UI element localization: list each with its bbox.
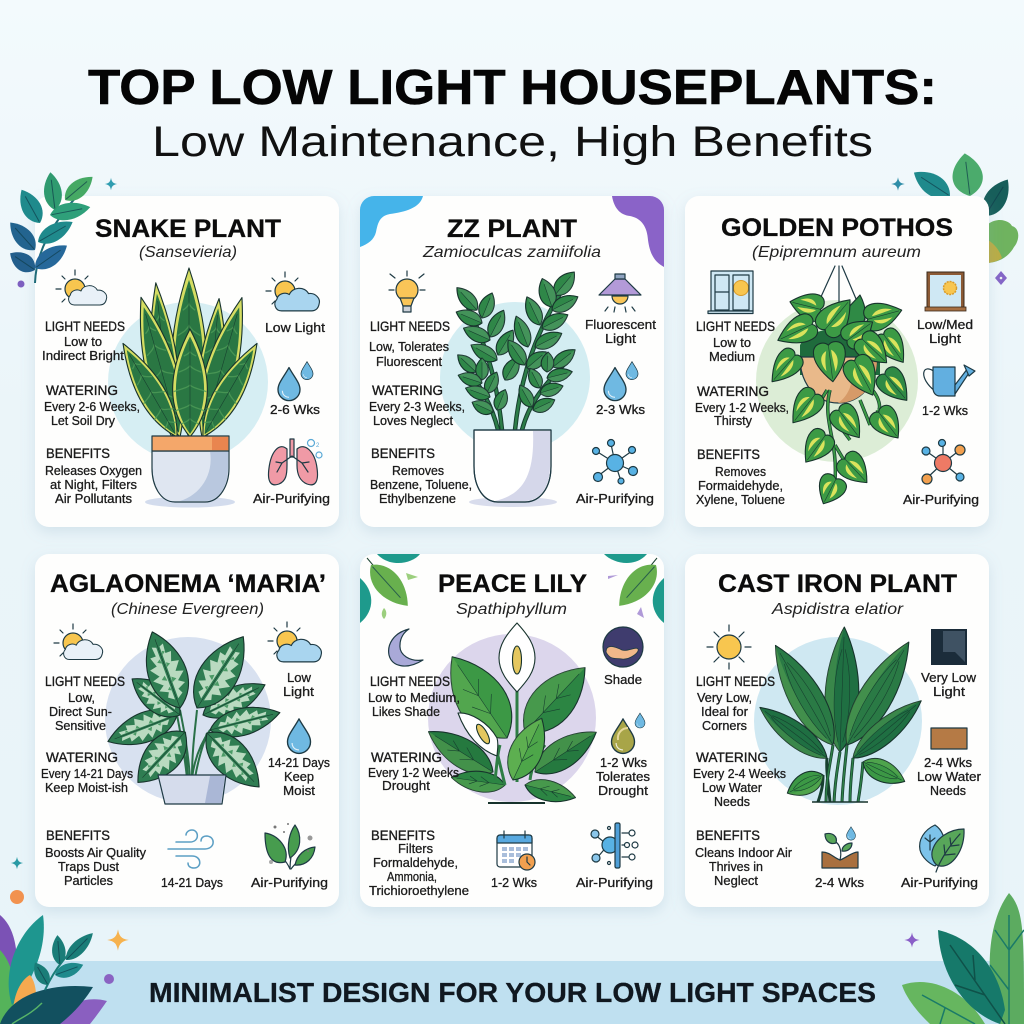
label: shade: Shade xyxy=(604,672,642,687)
benefits text: BENEFITS xyxy=(697,447,760,462)
icon: blue and green leaves xyxy=(920,825,964,872)
benefits text xyxy=(45,446,142,506)
light needs text xyxy=(696,674,775,733)
card background xyxy=(360,196,664,527)
benefits text xyxy=(370,446,472,506)
backdrop circle xyxy=(428,634,596,802)
light needs text xyxy=(369,319,450,369)
benefits text: BENEFITS xyxy=(46,446,110,461)
icon: shade hand xyxy=(603,627,643,667)
watering text: Every 14-21 Days xyxy=(41,766,133,781)
icon: window with sun xyxy=(708,271,753,314)
card background xyxy=(360,554,664,907)
pot shadow xyxy=(145,496,235,508)
label: watering interval: 2-6 Wks xyxy=(270,402,321,417)
icon: watering can xyxy=(924,365,975,396)
watering text: WATERING xyxy=(46,750,118,765)
panel: zz plant xyxy=(360,196,664,527)
pot xyxy=(152,436,229,502)
icon: light bulb xyxy=(389,271,425,312)
heading: AGLAONEMA ‘MARIA’ xyxy=(50,570,326,598)
benefits text xyxy=(45,828,146,888)
light needs text: LIGHT NEEDS xyxy=(696,319,775,334)
watering text: WATERING xyxy=(696,750,768,765)
light needs text xyxy=(696,319,775,364)
pot xyxy=(474,430,551,502)
heading: GOLDEN POTHOS xyxy=(721,214,953,242)
watering text: WATERING xyxy=(46,383,118,398)
label: air-purifying: Air-Purifying xyxy=(903,492,979,507)
botanical name: (Epipremnum aureum xyxy=(752,244,921,261)
pot xyxy=(158,775,226,804)
heading: CAST IRON PLANT xyxy=(718,570,957,598)
decoration: orange dot xyxy=(10,890,24,904)
watering text xyxy=(695,384,789,428)
benefits text: Neglect xyxy=(714,873,758,888)
benefits text: Traps Dust xyxy=(58,859,119,874)
watering text: WATERING xyxy=(372,383,443,398)
light needs text: Sensitive xyxy=(55,718,106,733)
title: TOP LOW LIGHT HOUSEPLANTS: xyxy=(88,61,937,115)
decoration: bottom-left foliage xyxy=(0,915,107,1024)
decoration: purple diamond xyxy=(995,271,1007,285)
botanical name: Zamioculcas zamiifolia xyxy=(422,244,601,261)
benefits text: Removes xyxy=(715,464,766,479)
benefits text: Formaidehyde, xyxy=(698,478,783,493)
footer text: MINIMALIST DESIGN FOR YOUR LOW LIGHT SPACES xyxy=(149,977,876,1008)
benefits text: Boosts Air Quality xyxy=(45,845,146,860)
icon: calendar with clock xyxy=(497,831,535,870)
icon: water drops xyxy=(278,362,313,401)
label: low light: Low Light xyxy=(265,320,325,335)
card background xyxy=(685,554,989,907)
icon: soil block xyxy=(931,728,967,749)
label: fluorescent light xyxy=(585,317,656,346)
label: low light: Low xyxy=(287,670,312,685)
label: very low light xyxy=(921,670,977,699)
decoration: top-left branch xyxy=(4,170,98,283)
plant illustration xyxy=(112,268,268,444)
card background xyxy=(35,554,339,907)
heading: SNAKE PLANT xyxy=(95,215,281,243)
light needs text: Very Low, xyxy=(697,690,752,705)
plant illustration xyxy=(452,267,581,430)
icon: wind xyxy=(168,830,213,868)
decoration: bottom purple dot xyxy=(104,974,114,984)
plant illustration xyxy=(421,623,604,807)
watering text: Needs xyxy=(714,794,750,809)
backdrop circle xyxy=(756,300,918,462)
label: low water needs: 2-4 Wks xyxy=(924,755,973,770)
watering text xyxy=(693,750,786,809)
label: fluorescent light: Fluorescent xyxy=(585,317,656,332)
label: tolerates drought: Tolerates xyxy=(596,769,651,784)
watering text: Let Soil Dry xyxy=(51,413,115,428)
backdrop circle xyxy=(105,637,271,803)
light needs text: Low to xyxy=(713,335,751,350)
label: very low light: Very Low xyxy=(921,670,977,685)
light needs text: Low, Tolerates xyxy=(369,339,449,354)
icon: sprout in soil xyxy=(822,827,858,868)
watering text: Low Water xyxy=(702,780,763,795)
label: watering interval: 2-3 Wks xyxy=(596,402,646,417)
panel: golden pothos xyxy=(685,196,989,527)
common name: (Chinese Evergreen) xyxy=(111,601,264,618)
benefits text xyxy=(695,828,793,888)
benefits text: Filters xyxy=(398,841,433,856)
benefits text: BENEFITS xyxy=(371,446,435,461)
icon: air filter molecules xyxy=(591,823,638,868)
pot shadow xyxy=(469,497,557,507)
backdrop circle xyxy=(440,302,590,452)
decoration: top-right sparkle xyxy=(891,177,905,191)
plant illustration xyxy=(103,625,283,799)
backdrop circle xyxy=(108,302,268,462)
plant illustration xyxy=(753,626,929,803)
icon: crescent moon xyxy=(389,629,423,666)
label: low light: Light xyxy=(283,684,314,699)
benefits text: Ethylbenzene xyxy=(379,491,456,506)
card background xyxy=(35,196,339,527)
benefits text: Benzene, Toluene, xyxy=(370,477,472,492)
label: low/med light: Low/Med xyxy=(917,317,973,332)
label: very low light: Light xyxy=(933,684,965,699)
watering text: Thirsty xyxy=(714,413,752,428)
botanical name: Aspidistra elatior xyxy=(771,601,904,618)
botanical name: Spathiphyllum xyxy=(456,601,567,618)
label: low water needs: Low Water xyxy=(917,769,982,784)
watering text: Loves Neglect xyxy=(373,413,453,428)
light needs text: Low, xyxy=(68,690,95,705)
benefits text: Trichioroethylene xyxy=(369,883,469,898)
icon: sun and blue cloud xyxy=(268,622,321,662)
light needs text: Ideal for xyxy=(701,704,749,719)
watering text: WATERING xyxy=(697,384,769,399)
label: tolerates drought: Drought xyxy=(598,783,648,798)
label: air-purifying: Air-Purifying xyxy=(253,491,330,506)
label: low water needs: Needs xyxy=(930,783,966,798)
light needs text: Low to Medium, xyxy=(368,690,460,705)
benefits text: Cleans Indoor Air xyxy=(695,845,793,860)
footer band xyxy=(0,961,1024,1024)
label: low light xyxy=(283,670,314,699)
light needs text: LIGHT NEEDS xyxy=(370,674,450,689)
card background xyxy=(685,196,989,527)
benefits text: BENEFITS xyxy=(696,828,760,843)
benefits text: Air Pollutants xyxy=(55,491,132,506)
decoration: left sparkle xyxy=(11,857,23,869)
subtitle: Low Maintenance, High Benefits xyxy=(152,118,873,166)
light needs text: LIGHT NEEDS xyxy=(370,319,450,334)
benefits text: Ammonia, xyxy=(387,869,437,884)
benefits text: BENEFITS xyxy=(46,828,110,843)
backdrop circle xyxy=(754,637,922,805)
watering text xyxy=(41,750,133,795)
benefits text: BENEFITS xyxy=(371,828,435,843)
icon: framed window with sun xyxy=(925,272,966,311)
light needs text xyxy=(368,674,460,719)
label: wind interval: 14-21 Days xyxy=(161,875,223,890)
light needs text: Low to xyxy=(64,334,102,349)
label: air-purifying: Air-Purifying xyxy=(576,875,653,890)
watering text xyxy=(369,383,465,428)
icon: sun xyxy=(707,625,751,669)
icon: water drops xyxy=(604,362,638,401)
light needs text: Indirect Bright xyxy=(42,348,124,363)
icon: lungs: 2 xyxy=(316,443,320,449)
icon: sun and blue cloud xyxy=(266,272,319,311)
watering text: Drought xyxy=(382,778,430,793)
panel: aglaonema maria xyxy=(35,554,339,907)
decoration: purple star xyxy=(904,932,920,948)
label: watering interval: 1-2 Wks xyxy=(922,403,968,418)
light needs text: Likes Shade xyxy=(372,704,440,719)
icon: fluorescent lamp xyxy=(599,274,641,312)
benefits text xyxy=(696,447,785,507)
label: tolerates drought xyxy=(596,755,651,798)
label: keep moist: 14-21 Days xyxy=(268,755,330,770)
label: tolerates drought: 1-2 Wks xyxy=(600,755,647,770)
label: sprout interval: 2-4 Wks xyxy=(815,875,865,890)
light needs text xyxy=(42,319,125,363)
light needs text: LIGHT NEEDS xyxy=(45,674,125,689)
watering text: Every 2-6 Weeks, xyxy=(44,399,140,414)
watering text: Every 2-4 Weeks xyxy=(693,766,786,781)
plant illustration xyxy=(762,266,917,510)
light needs text: Direct Sun- xyxy=(49,704,112,719)
icon: sun and cloud xyxy=(54,624,103,660)
benefits text: Releases Oxygen xyxy=(45,463,142,478)
heading: PEACE LILY xyxy=(438,570,587,598)
label: air-purifying: Air-Purifying xyxy=(251,875,328,890)
watering text xyxy=(44,383,140,428)
light needs text: Corners xyxy=(702,718,747,733)
light needs text xyxy=(45,674,125,733)
benefits text: Xylene, Toluene xyxy=(696,492,785,507)
benefits text: Thrives in xyxy=(709,859,763,874)
watering text: Every 1-2 Weeks xyxy=(368,765,459,780)
label: air-purifying: Air-Purifying xyxy=(576,491,654,506)
watering text: Every 2-3 Weeks, xyxy=(369,399,465,414)
benefits text: Particles xyxy=(64,873,113,888)
label: low water needs xyxy=(917,755,982,798)
watering text: Keep Moist-ish xyxy=(45,780,128,795)
label: low/med light xyxy=(917,317,973,346)
light needs text: LIGHT NEEDS xyxy=(696,674,775,689)
label: keep moist xyxy=(268,755,330,798)
heading: ZZ PLANT xyxy=(447,215,577,243)
icon: dark square xyxy=(931,629,967,665)
panel: cast iron plant xyxy=(685,554,989,907)
icon: lungs xyxy=(268,439,322,485)
icon: sprout with particles xyxy=(265,823,315,869)
watering text: Every 1-2 Weeks, xyxy=(695,400,789,415)
label: air-purifying: Air-Purifying xyxy=(901,875,978,890)
label: keep moist: Moist xyxy=(283,783,315,798)
icon: sun and cloud xyxy=(56,270,107,305)
icon: molecule xyxy=(592,440,638,484)
decoration: top-right leaves xyxy=(908,151,1018,263)
label: calendar interval: 1-2 Wks xyxy=(491,875,537,890)
decoration: bottom-right foliage xyxy=(902,893,1024,1024)
label: low/med light: Light xyxy=(929,331,961,346)
decoration: orange star xyxy=(107,929,129,951)
icon: water drop xyxy=(288,719,310,753)
benefits text: Formaldehyde, xyxy=(373,855,458,870)
decoration: purple dot xyxy=(18,280,24,288)
light needs text: Medium xyxy=(709,349,755,364)
watering text xyxy=(368,750,459,793)
panel: peace lily xyxy=(360,554,665,907)
icon: olive drop xyxy=(612,713,645,753)
label: fluorescent light: Light xyxy=(605,331,636,346)
watering text: WATERING xyxy=(371,750,442,765)
light needs text: LIGHT NEEDS xyxy=(45,319,125,334)
light needs text: Fluorescent xyxy=(376,354,442,369)
benefits text xyxy=(369,828,469,898)
corner: purple xyxy=(612,196,664,267)
benefits text: Removes xyxy=(392,463,444,478)
corner: blue xyxy=(360,196,423,247)
label: keep moist: Keep xyxy=(284,769,314,784)
corner foliage xyxy=(360,554,665,623)
decoration: top-left sparkle xyxy=(105,178,117,190)
icon: molecule xyxy=(922,440,965,484)
panel: snake plant xyxy=(35,196,339,527)
benefits text: at Night, Filters xyxy=(50,477,137,492)
botanical name: (Sansevieria) xyxy=(139,244,237,261)
